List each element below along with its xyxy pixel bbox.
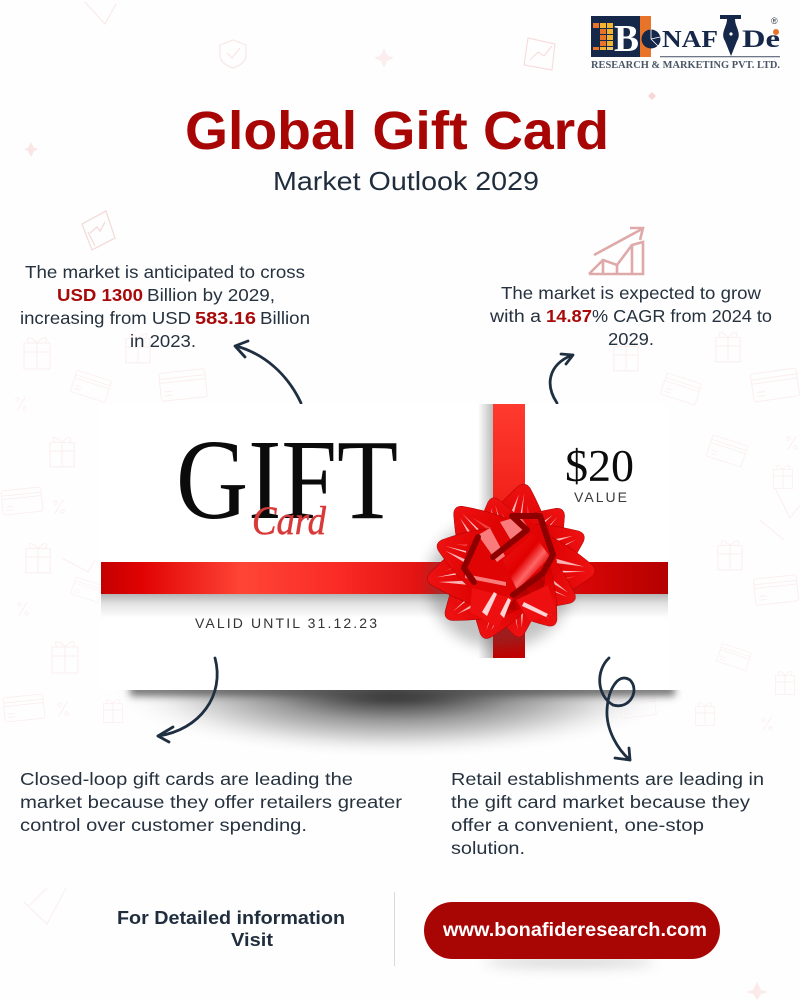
text block: closed-loop cards: Closed-loop gift cards are leading the: [20, 769, 353, 789]
text block: CAGR: 2029.: [608, 329, 654, 349]
icon: growth chart: [589, 228, 643, 274]
vertical ribbon: [493, 404, 525, 658]
logo: NAF: [662, 27, 718, 53]
logo: B: [614, 18, 639, 60]
text block: retail establishments: solution.: [451, 838, 525, 858]
card drop shadow: [124, 690, 681, 750]
subtitle: Market Outlook 2029: [273, 166, 539, 196]
ribbon shadows: [101, 404, 668, 658]
text block: market size: Billion by 2029,: [147, 285, 275, 305]
text block: retail establishments: [451, 769, 764, 858]
title: Global Gift Card: [185, 101, 609, 161]
footer call to action: For Detailed information: [117, 908, 345, 928]
price: $20: [565, 441, 634, 491]
text block: closed-loop cards: market because they offer retailers greater: [20, 792, 402, 812]
icon: book with chart: [82, 211, 115, 250]
website button: www.bonafideresearch.com: [442, 920, 707, 941]
text block: CAGR: The market is expected to grow: [501, 283, 761, 303]
arrow: to market size: [235, 341, 301, 403]
text block: market size: [20, 262, 310, 351]
text block: CAGR: with a: [489, 306, 541, 326]
logo: RESEARCH & MARKETING PVT. LTD.: [591, 60, 780, 71]
text block: market size: USD 1300: [57, 285, 143, 305]
text block: retail establishments: Retail establishments are leading in: [451, 769, 764, 789]
horizontal ribbon: [101, 562, 668, 594]
website button: [424, 902, 720, 968]
text block: closed-loop cards: control over customer spending.: [20, 815, 307, 835]
logo: [591, 15, 780, 71]
validity: VALID UNTIL 31.12.23: [195, 615, 377, 631]
text block: market size: Billion: [260, 308, 310, 328]
text block: retail establishments: offer a convenient, one-stop: [451, 815, 704, 835]
footer call to action: Visit: [231, 930, 273, 950]
arrow: to closed-loop text: [158, 658, 217, 742]
logo: De: [742, 26, 780, 53]
footer call to action: [117, 908, 345, 950]
script: Card: Card: [252, 498, 327, 543]
heading: GIFT: GIFT: [176, 416, 398, 543]
arrow: to retail text: [600, 658, 634, 760]
card face: [100, 404, 668, 690]
text block: market size: in 2023.: [130, 331, 196, 351]
text block: CAGR: % CAGR from 2024 to: [592, 306, 772, 326]
text block: closed-loop cards: [20, 769, 402, 835]
bow: [422, 477, 600, 651]
arrow: to CAGR: [550, 354, 573, 403]
text block: retail establishments: the gift card market because they: [451, 792, 750, 812]
text block: market size: 583.16: [195, 308, 256, 328]
value label: VALUE: [574, 489, 627, 505]
text block: CAGR: 14.87: [546, 306, 592, 326]
text block: CAGR: [489, 283, 772, 349]
text block: market size: increasing from USD: [20, 308, 191, 328]
text block: market size: The market is anticipated to cross: [25, 262, 305, 282]
gift card: [100, 404, 700, 770]
logo: ®: [771, 16, 778, 26]
